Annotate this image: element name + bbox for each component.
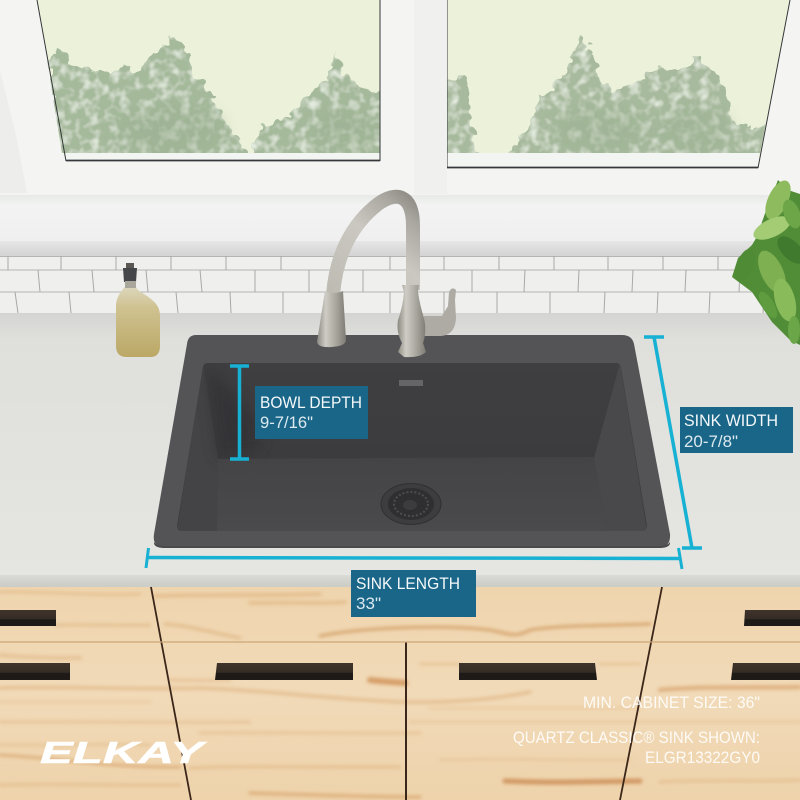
centre mullion shading (414, 0, 447, 194)
sink length label: SINK LENGTH (356, 574, 460, 593)
cabinet handles (0, 610, 800, 680)
sink width label (680, 407, 793, 453)
quartz countertop (0, 313, 800, 588)
left wall edge (0, 70, 27, 193)
model note (513, 728, 760, 767)
faucet spout arch (333, 197, 413, 295)
cabinet seams (0, 587, 800, 800)
model note: QUARTZ CLASSIC® SINK SHOWN: (513, 728, 760, 747)
sink length dimension line (146, 548, 682, 569)
left shrubs (47, 35, 380, 153)
faucet pull-down head (317, 291, 346, 347)
sill front edge (0, 241, 800, 256)
bowl depth label: 9-7/16" (260, 413, 313, 432)
model note: ELGR13322GY0 (645, 748, 760, 767)
right shrubs (448, 35, 766, 153)
sink width label: 20-7/8" (684, 432, 738, 451)
faucet (317, 197, 456, 357)
sink (154, 335, 670, 548)
brand logo: ELKAY (40, 735, 208, 770)
faucet body (398, 285, 426, 357)
wooden cabinets (0, 587, 800, 800)
bowl depth label (255, 386, 368, 439)
sink width label: SINK WIDTH (684, 411, 778, 430)
bowl depth dimension line (230, 366, 249, 459)
right window pane (435, 0, 790, 168)
plant (732, 177, 800, 345)
soap bottle (116, 263, 160, 357)
window sill (0, 195, 800, 241)
sink bowl (170, 360, 650, 535)
bowl depth label: BOWL DEPTH (260, 393, 362, 412)
faucet handle (424, 288, 456, 336)
sink front shadow (154, 542, 670, 548)
wall and window frame (0, 0, 800, 256)
wood grain (0, 592, 800, 797)
subway tile backsplash (0, 256, 800, 314)
left window pane (37, 0, 395, 165)
sink length label: 33" (356, 594, 381, 613)
sink length label (351, 570, 476, 617)
cabinet size note: MIN. CABINET SIZE: 36" (583, 693, 760, 712)
sink badge (399, 380, 423, 386)
drain (381, 484, 441, 524)
sink width dimension line (644, 337, 702, 548)
sink rim (154, 335, 670, 548)
